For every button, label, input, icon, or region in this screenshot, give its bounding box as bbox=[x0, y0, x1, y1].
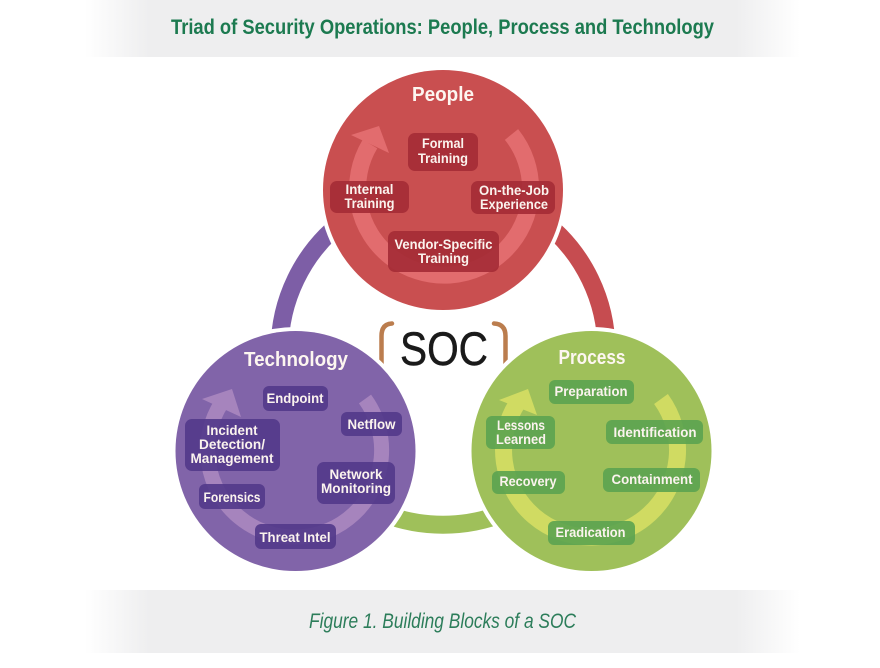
arc: people to process bbox=[536, 216, 606, 361]
item: on-the-job experience: On-the-Job bbox=[479, 182, 549, 198]
item: incident detection/management: Management bbox=[190, 450, 274, 466]
item: eradication bbox=[548, 521, 635, 545]
panel: process bbox=[472, 331, 712, 571]
item: forensics bbox=[199, 484, 265, 509]
item: containment: Containment bbox=[612, 471, 693, 487]
item: identification: Identification bbox=[614, 424, 696, 440]
item: on-the-job experience: Experience bbox=[480, 196, 548, 212]
item: incident detection/management: Detection/ bbox=[199, 436, 265, 452]
item: vendor-specific training: Training bbox=[418, 250, 469, 266]
caption band bbox=[85, 590, 800, 653]
cycle arrow bbox=[351, 126, 531, 275]
title band bbox=[85, 0, 800, 57]
item: network monitoring bbox=[317, 462, 395, 504]
item: preparation: Preparation bbox=[554, 383, 628, 399]
SOC label bbox=[382, 322, 506, 375]
item: on-the-job experience bbox=[471, 181, 555, 214]
item: incident detection/management bbox=[185, 419, 280, 471]
cycle arrow bbox=[202, 389, 382, 537]
item: lessons learned bbox=[486, 416, 555, 449]
heading: Process bbox=[558, 347, 626, 369]
item: formal training: Formal bbox=[422, 135, 464, 151]
panel: people bbox=[323, 70, 563, 310]
item: endpoint: Endpoint bbox=[266, 390, 324, 406]
item: recovery: Recovery bbox=[500, 473, 557, 489]
item: endpoint bbox=[263, 386, 328, 411]
item: containment bbox=[603, 468, 700, 492]
item: network monitoring: Network bbox=[330, 466, 383, 482]
item: netflow bbox=[341, 412, 402, 436]
arc: process to technology bbox=[360, 502, 526, 525]
item: vendor-specific training: Vendor-Specific bbox=[394, 236, 493, 252]
item: netflow: Netflow bbox=[348, 416, 396, 432]
arc: technology to people bbox=[280, 216, 350, 361]
item: identification bbox=[606, 420, 703, 444]
panel: technology bbox=[176, 331, 416, 571]
item: formal training bbox=[408, 133, 478, 171]
brackets bbox=[382, 324, 506, 372]
item: network monitoring: Monitoring bbox=[321, 480, 391, 496]
title: Triad of Security Operations: People, Process and Technology bbox=[171, 16, 714, 39]
item: internal training bbox=[330, 181, 409, 213]
heading: People bbox=[412, 84, 474, 106]
figure caption: Figure 1. Building Blocks of a SOC bbox=[309, 610, 577, 633]
cycle arrow bbox=[499, 389, 678, 537]
item: eradication: Eradication bbox=[556, 524, 626, 540]
item: threat intel bbox=[255, 524, 336, 549]
item: incident detection/management: Incident bbox=[206, 422, 258, 438]
item: lessons learned: Lessons bbox=[497, 417, 545, 433]
connecting ring arcs bbox=[280, 216, 606, 525]
circle bbox=[323, 70, 563, 310]
item: recovery bbox=[492, 471, 565, 494]
item: vendor-specific training bbox=[388, 231, 499, 272]
circle bbox=[176, 331, 416, 571]
item: lessons learned: Learned bbox=[496, 431, 546, 447]
item: preparation bbox=[549, 380, 634, 404]
item: forensics: Forensics bbox=[204, 489, 261, 505]
item: internal training: Training bbox=[344, 195, 394, 211]
item: formal training: Training bbox=[418, 150, 468, 166]
item: internal training: Internal bbox=[346, 181, 394, 197]
heading: Technology bbox=[244, 349, 349, 371]
circle bbox=[472, 331, 712, 571]
item: threat intel: Threat Intel bbox=[260, 529, 330, 545]
SOC text: SOC bbox=[400, 322, 488, 375]
